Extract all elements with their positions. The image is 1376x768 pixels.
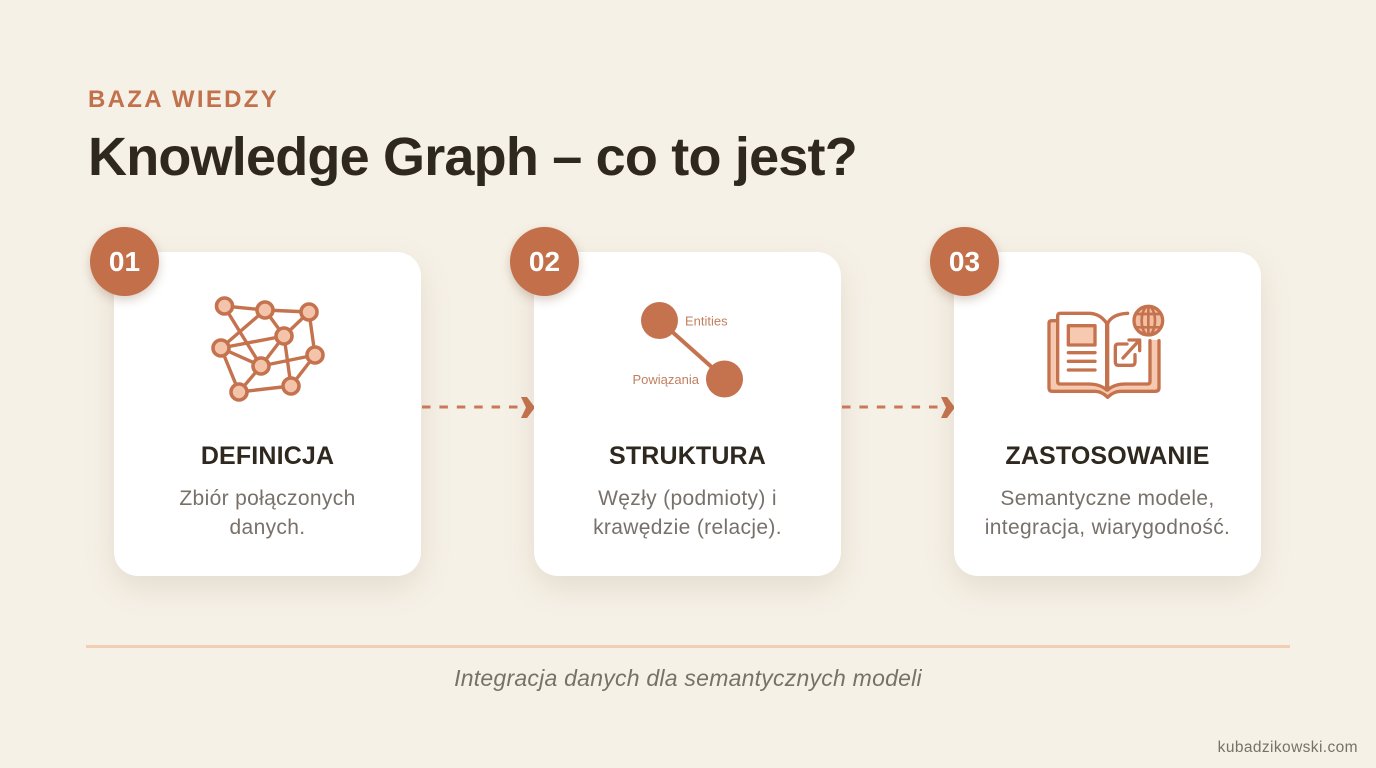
icon: entity relation: Powiązania <box>632 372 700 387</box>
panel: definicja <box>114 252 421 576</box>
text: struktura <box>593 487 782 539</box>
icon: book with globe <box>1047 304 1164 400</box>
badge 02: 02 <box>529 246 560 277</box>
footer tagline: Integracja danych dla semantycznych modeli <box>454 665 922 691</box>
heading: zastosowanie: ZASTOSOWANIE <box>1005 442 1210 470</box>
badge 03 <box>930 227 999 296</box>
heading: struktura: STRUKTURA <box>609 442 766 470</box>
text: definicja: danych. <box>230 516 305 539</box>
text: struktura: krawędzie (relacje). <box>593 516 782 539</box>
heading: definicja: DEFINICJA <box>201 442 334 470</box>
divider rule <box>86 645 1290 648</box>
badge 01: 01 <box>109 246 140 277</box>
badge 01 <box>90 227 159 296</box>
title: Knowledge Graph – co to jest? <box>88 127 857 187</box>
badge 02 <box>510 227 579 296</box>
text: zastosowanie: Semantyczne modele, <box>1000 487 1215 510</box>
text: zastosowanie <box>985 487 1230 539</box>
panel: zastosowanie <box>954 252 1261 576</box>
watermark: kubadzikowski.com <box>1218 739 1358 756</box>
icon: entity relation: Entities <box>685 314 728 328</box>
badge 03: 03 <box>949 246 980 277</box>
panel: struktura <box>534 252 841 576</box>
arrow: 1 to 2 <box>422 397 534 418</box>
text: definicja: Zbiór połączonych <box>179 487 356 510</box>
text: definicja <box>179 487 356 539</box>
eyebrow: category label: BAZA WIEDZY <box>88 86 279 113</box>
text: zastosowanie: integracja, wiarygodność. <box>985 516 1230 539</box>
arrow: 2 to 3 <box>842 397 954 418</box>
text: struktura: Węzły (podmioty) i <box>598 487 777 510</box>
